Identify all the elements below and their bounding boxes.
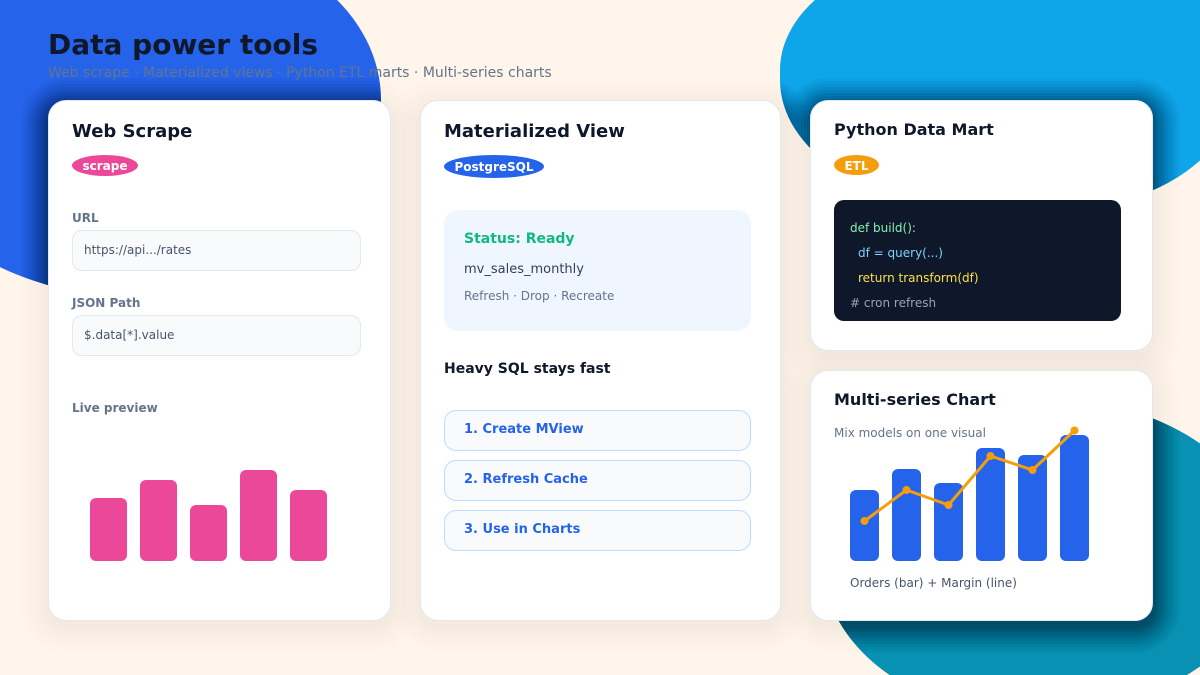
live preview label: Live preview [72,401,158,415]
status box [444,210,751,331]
PostgreSQL pill: PostgreSQL [454,160,534,174]
URL input [72,230,361,271]
multi-series heading: Multi-series Chart [834,390,996,409]
code line 2: df = query(...) [858,246,943,260]
code block [834,200,1121,321]
status text: Status: Ready [464,231,575,247]
callout: heavy SQL: Heavy SQL stays fast [444,361,611,377]
bar chart: live preview [90,470,327,561]
bar series: orders [850,435,1089,561]
JSON path label: JSON Path [72,296,140,310]
panel: materialized view [414,99,787,632]
code line 3: return transform(df) [858,271,979,285]
code line 1: def build(): [850,221,916,235]
view actions: Refresh · Drop · Recreate [464,289,614,303]
step 2: 2. Refresh Cache [464,472,588,487]
python data mart heading: Python Data Mart [834,120,994,139]
title: Data power tools [48,28,318,61]
step 2 [444,460,751,501]
panel: multi-series chart [804,369,1159,632]
background blob: teal bottom right [838,418,1200,675]
chart subtitle: Mix models on one visual [834,426,986,440]
URL label: URL [72,211,99,225]
scrape pill [72,155,138,176]
line series: margin [860,426,1078,525]
ETL pill: ETL [844,159,869,173]
code comment: # cron refresh [850,296,936,310]
panel: python data mart [804,99,1159,362]
chart caption: Orders (bar) + Margin (line) [850,576,1017,590]
panel: web scrape [42,99,397,632]
view name: mv_sales_monthly [464,262,584,277]
web scrape heading: Web Scrape [72,121,192,142]
ETL pill [834,155,879,175]
PostgreSQL pill [444,155,544,178]
step 1: 1. Create MView [464,422,584,437]
step 1 [444,410,751,451]
background blob: sky blue top right [780,0,1200,209]
materialized view heading: Materialized View [444,121,625,142]
step 3: 3. Use in Charts [464,522,580,537]
step 3 [444,510,751,551]
scrape pill: scrape [82,159,128,173]
URL input: https://api.../rates [84,243,191,257]
JSON path input: $.data[*].value [84,328,174,342]
JSON path input [72,315,361,356]
background blob: blue top left [0,0,381,305]
subtitle: Web scrape · Materialized views · Python ETL marts · Multi-series charts [48,65,552,81]
